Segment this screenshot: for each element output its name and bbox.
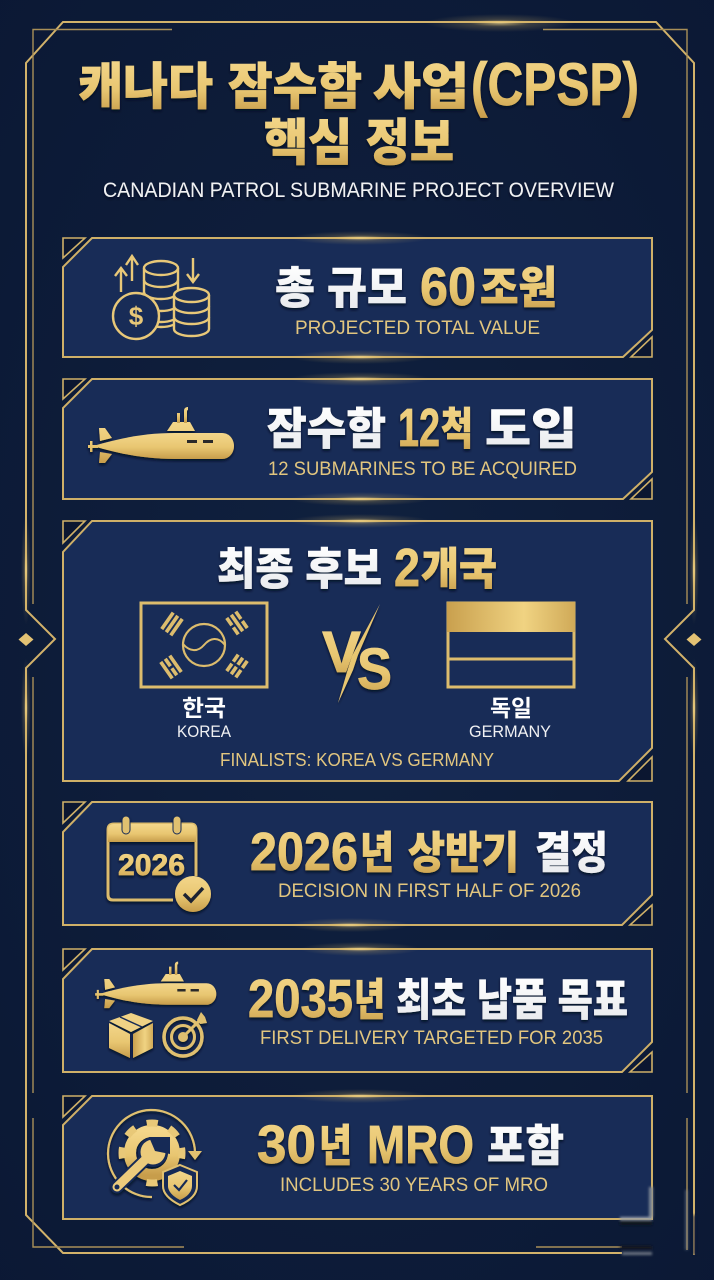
heading: 30	[257, 1115, 316, 1175]
heading: 2035	[248, 969, 353, 1029]
title	[78, 51, 639, 171]
heading: 총 규모	[275, 264, 407, 313]
icon: package	[109, 1013, 153, 1058]
icon: calendar 2026: 2026	[118, 849, 185, 882]
heading: 잠수함	[267, 405, 386, 454]
heading: 도입	[485, 405, 577, 454]
heading	[250, 822, 608, 882]
label: Germany	[469, 695, 551, 741]
panel: submarines	[63, 372, 652, 506]
heading: 12	[398, 398, 440, 458]
heading: 조원	[480, 264, 557, 313]
watermark smudge	[620, 1187, 696, 1255]
heading: 상반기	[408, 829, 519, 878]
subtext: 12 SUBMARINES TO BE ACQUIRED	[268, 459, 577, 480]
subtitle: CANADIAN PATROL SUBMARINE PROJECT OVERVIEW	[103, 179, 614, 202]
heading	[217, 538, 497, 598]
panel: delivery	[63, 942, 652, 1072]
label: Germany: 독일	[490, 695, 532, 721]
heading: 결정	[535, 829, 608, 878]
label: Korea	[177, 695, 232, 741]
heading: 2	[394, 538, 420, 598]
heading: 2026	[250, 822, 358, 882]
heading: 개국	[421, 545, 497, 594]
icon: VS: V	[322, 620, 361, 685]
label: Korea: 한국	[182, 695, 226, 721]
panel: total value	[63, 231, 652, 364]
icon: coins and arrows	[113, 256, 209, 339]
heading: 년	[354, 976, 385, 1025]
flag: Korea	[141, 603, 267, 687]
icon: target	[164, 1012, 207, 1056]
heading: 최초 납품 목표	[396, 976, 628, 1025]
heading: 60	[420, 257, 476, 317]
title: 잠수함	[228, 59, 362, 115]
icon: VS	[322, 604, 392, 703]
label: Germany: GERMANY	[469, 722, 551, 741]
subtext: FIRST DELIVERY TARGETED FOR 2035	[260, 1028, 603, 1049]
subtext: DECISION IN FIRST HALF OF 2026	[278, 881, 581, 902]
subtext: PROJECTED TOTAL VALUE	[295, 318, 540, 339]
icon: coins and arrows: $	[129, 301, 144, 331]
heading: 년	[360, 829, 394, 878]
heading: 최종 후보	[217, 545, 382, 594]
panel: decision	[63, 802, 652, 932]
icon: submarine	[95, 962, 216, 1008]
subtext: INCLUDES 30 YEARS OF MRO	[280, 1175, 548, 1196]
panel: finalists	[63, 514, 652, 781]
heading	[257, 1115, 564, 1175]
heading: MRO	[367, 1115, 474, 1175]
icon: submarine	[88, 407, 234, 463]
label: Korea: KOREA	[177, 722, 232, 741]
icon: calendar 2026	[108, 816, 211, 912]
heading: 포함	[487, 1122, 564, 1171]
icon: VS: S	[357, 637, 392, 702]
heading	[275, 257, 557, 317]
heading: 척	[441, 405, 473, 454]
title: (CPSP)	[471, 51, 639, 118]
heading	[267, 398, 577, 458]
heading: 년	[319, 1122, 352, 1171]
panel: MRO	[63, 1089, 652, 1219]
title: 사업	[373, 59, 469, 115]
subtext: FINALISTS: KOREA VS GERMANY	[220, 750, 494, 770]
flag: Germany	[447, 602, 575, 687]
icon: gear, wrench and shield	[108, 1110, 202, 1205]
title: 핵심 정보	[264, 115, 454, 171]
heading	[248, 969, 628, 1029]
title: 캐나다	[78, 59, 213, 115]
